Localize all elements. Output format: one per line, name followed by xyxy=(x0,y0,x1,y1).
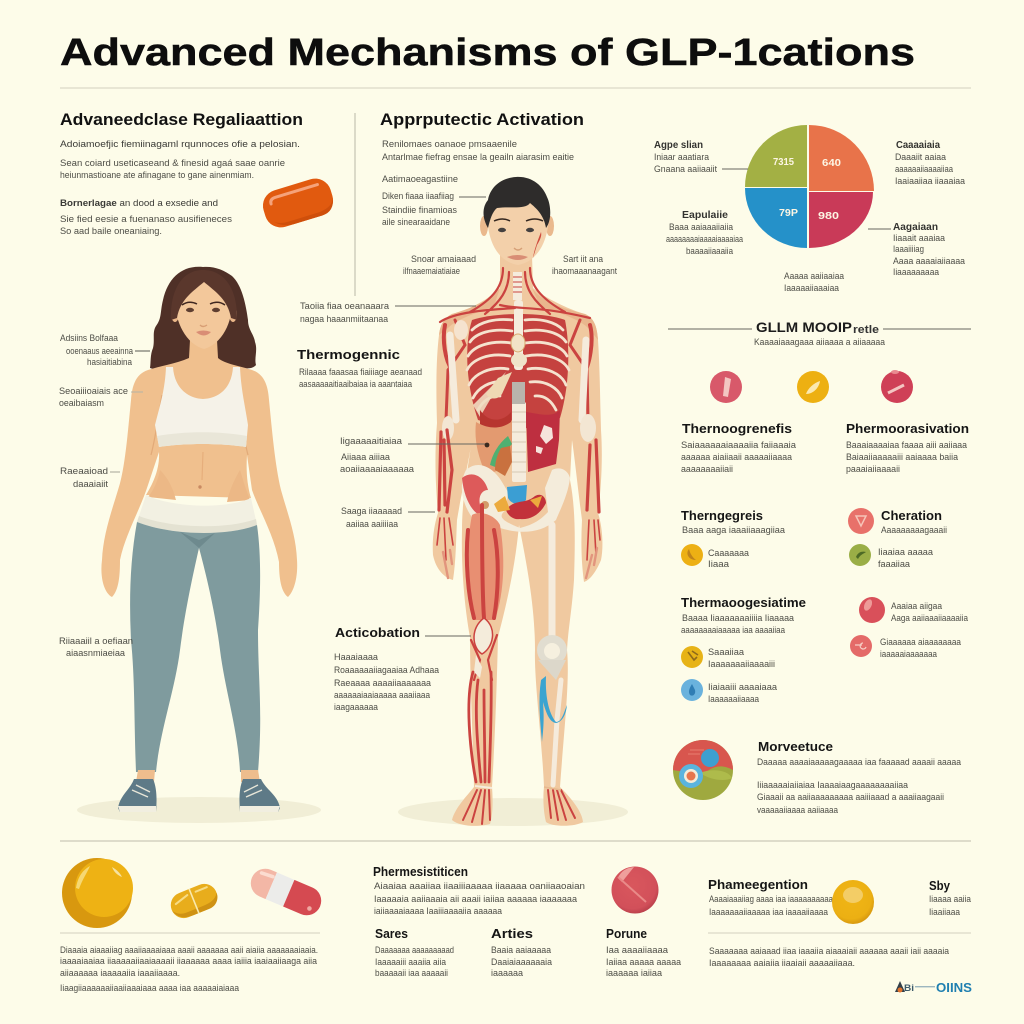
column: sares: Iaaaaaiii aaaiia aiia xyxy=(375,957,446,967)
logo: OIINS xyxy=(936,980,972,995)
legend: pie labels: Daaaiit aaiaa xyxy=(895,152,946,162)
text block: bottom left: Diaaaia aiaaaiiag aaaiiaaaaiaaa aaaii aaaaaaa aaii aiaiia aaaaaaaiaaia. xyxy=(60,945,318,955)
panel: regulation text xyxy=(60,110,303,236)
text block: bottom left xyxy=(60,945,318,993)
heading: activation: Apprputectic Activation xyxy=(380,110,584,129)
text block: activation intro: Renilomaes oanaoe pmsaaenile xyxy=(382,139,517,149)
section: red markers: iaaaaaiaaaaaaa xyxy=(880,649,937,659)
legend: pie labels: baaaaiiaaaiia xyxy=(686,246,733,256)
labels: neck callouts xyxy=(403,254,617,276)
section: morveetuce: Iiiaaaaaiaiiaiaa Iaaaaiaagaaaaaaaaiiaa xyxy=(757,780,908,790)
labels: anatomy callouts: Rilaaaa faaasaa fiaiiiage aeanaad xyxy=(299,367,422,377)
section: thermogenesis columns: Baiaaiiaaaaaiii aaiaaaa baiia xyxy=(846,452,958,462)
section: cheration: Aaaaaaaaagaaaii xyxy=(881,525,947,535)
heading: GLLM section: GLLM MOOIP xyxy=(756,319,852,335)
text block: regulation intro: Sean coiard useticaseand & finesid agaá saae oanrie xyxy=(60,158,285,168)
panel: bottom centre pharmacy xyxy=(373,865,681,978)
woman top xyxy=(155,367,248,447)
section: morveetuce: Daaaaa aaaaiaaaaagaaaaa iaa faaaaad aaaaii aaaaa xyxy=(757,757,961,767)
section: thermogenesis columns: aaaaaa aiaiiaaii aaaaaiiaaaa xyxy=(681,452,792,462)
labels: anatomy callouts: Roaaaaaaiiagaaiaa Adhaaa xyxy=(334,665,439,675)
woman waistband xyxy=(137,495,257,533)
woman body xyxy=(101,340,297,597)
column: sares: Daaaaaaa aaaaaaaaad xyxy=(375,945,454,955)
column: sares: baaaaaii iaa aaaaaii xyxy=(375,968,448,978)
section: thermaoogesiatime: Iaaaaaaiiaaaa xyxy=(708,694,759,704)
legend: pie labels: Iniaar aaatiara xyxy=(654,152,709,162)
icons: three tablets xyxy=(710,370,913,403)
man spine xyxy=(511,300,527,482)
labels: anatomy callouts: iaagaaaaaa xyxy=(334,702,378,712)
column: sares xyxy=(375,927,454,978)
column: porune: iaaaaaa iaiiaa xyxy=(606,968,662,978)
column: porune xyxy=(606,927,681,978)
heading: regulation: Advaneedclase Regaliaattion xyxy=(60,110,303,129)
woman leggings xyxy=(130,522,260,772)
panel: bottom right pharmacy: Aaaaiaaaiiag aaaa iaa iaaaaaaaaaa xyxy=(709,894,833,904)
text block: regulation detail xyxy=(60,198,233,236)
pie chart: 79P xyxy=(779,207,798,219)
legend: pie labels: Aaaaa aaiiaaiaa xyxy=(784,271,844,281)
legend: pie labels: Aaaa aaaaiaiiaaaa xyxy=(893,256,965,266)
labels: woman callouts: Riiaaaiil a oefiaan xyxy=(59,636,133,646)
panel: bottom centre pharmacy: Aiaaiaa aaaiiaa iiaaiiiaaaaa iiaaaaa oaniiaaoaian xyxy=(374,881,585,891)
panel: bottom right pharmacy: Iiaaaa aaiia xyxy=(929,894,971,904)
column: arties xyxy=(491,927,552,978)
labels: neck callouts: Sart iit ana xyxy=(563,254,603,264)
text block: bottom left: iaaaaiaaiaa iiaaaaaiiaaiaaaaii iiaaaaaa aaaa iaiiia iaaiaaiiaaga aiia xyxy=(60,956,317,966)
text block: regulation intro: heiunmastioane ate afinagane to gane ainenmiam. xyxy=(60,170,254,180)
section: therngegreis xyxy=(681,509,785,569)
text block: activation intro: Antarlmae fiefrag ensae la geailn aiarasim eaitie xyxy=(382,152,574,162)
man ribcage xyxy=(467,314,569,430)
man arms xyxy=(437,320,600,578)
heading: GLLM section: retle xyxy=(853,324,879,336)
legend: pie labels: Caaaaiaia xyxy=(896,140,940,151)
logo: Bi xyxy=(904,983,914,993)
section: morveetuce: Giaaaii aa aaiiaaaaaaaaa aaiiiaaad a aaaiiaagaaii xyxy=(757,792,944,802)
column: arties: Daaiaiaaaaaaia xyxy=(491,957,552,967)
panel: bottom right pharmacy: Iiaaiiaaa xyxy=(929,907,960,917)
column: arties: Baaia aaiaaaaa xyxy=(491,945,551,955)
panel: bottom left capsules xyxy=(60,858,326,993)
illustration: anatomy figure xyxy=(398,177,628,826)
text block: activation intro: Staindiie finamioas xyxy=(382,205,457,215)
section: cheration: Iiaaiaa aaaaa xyxy=(878,547,933,557)
legend: pie labels: Gnaana aaiiaaiit xyxy=(654,164,717,174)
section: therngegreis: Iiaaa xyxy=(708,559,729,569)
labels: anatomy callouts: aaiiaa aaiiiiaa xyxy=(346,519,398,529)
section: thermogenesis columns xyxy=(681,422,969,474)
text block: regulation detail: Sie fied eesie a fuenanaso ausifieneces xyxy=(60,214,233,224)
text block: regulation intro xyxy=(60,139,300,180)
labels: woman callouts: oeaibaiasm xyxy=(59,398,104,408)
section: thermaoogesiatime: Baaaa Iiaaaaaaaiiiia Iiaaaaa xyxy=(682,613,794,623)
heading: GLLM section: Kaaaaiaaagaaa aiiaaaa a aiiaaaaa xyxy=(754,337,885,347)
legend: pie labels: Eapulaiie xyxy=(682,210,728,221)
labels: neck callouts: Snoar amaiaaad xyxy=(411,254,476,264)
text block: bottom left: aiiaaaaaa iaaaaaiia iaaaiiaaaa. xyxy=(60,968,180,978)
icon: orange pill xyxy=(259,175,337,231)
section: thermogenesis columns: Phermoorasivation xyxy=(846,422,969,436)
legend: pie labels: aaaaaaaaiaaaaiaaaaiaa xyxy=(666,234,743,244)
icon: yellow gel capsule xyxy=(832,880,874,924)
column: porune: Iaa aaaaiiaaaa xyxy=(606,945,668,955)
section: thermogenesis columns: Thernoogrenefis xyxy=(682,422,792,436)
labels: anatomy callouts: aasaaaaaitiaaibaiaa ia aaantaiaa xyxy=(299,379,412,389)
legend: pie labels: Iaaaaaiiaaaiaa xyxy=(784,283,839,293)
icon: combined capsule circle xyxy=(673,740,733,800)
section: red markers: Aaaiaa aiigaa xyxy=(891,601,942,611)
legend: pie labels: Baaa aaiaaaiiaiia xyxy=(669,222,733,232)
legend: pie labels: Iaaiaaiiaa iiaaaiaa xyxy=(895,176,965,186)
labels: anatomy callouts: aoaiiaaaaiaaaaaa xyxy=(340,464,414,474)
section: therngegreis: Therngegreis xyxy=(681,509,763,523)
legend: pie labels: Aagaiaan xyxy=(893,222,938,233)
column: arties: iaaaaaa xyxy=(491,968,523,978)
labels: anatomy callouts: Saaga iiaaaaad xyxy=(341,506,402,516)
section: therngegreis: Caaaaaaa xyxy=(708,548,749,558)
icon: large yellow capsule xyxy=(62,858,133,928)
panel: bottom centre pharmacy: iaiiaaaaiaaaa Iaaiiiaaaaiia aaaaaa xyxy=(374,906,502,916)
woman shoes xyxy=(118,779,280,812)
section: thermaoogesiatime xyxy=(681,596,806,704)
woman hair back xyxy=(150,267,256,369)
man pelvis xyxy=(462,465,570,532)
pie chart: 980 xyxy=(818,210,839,222)
section: thermogenesis columns: Baaaiaaaaiaa faaaa aiii aaiiaaa xyxy=(846,440,967,450)
pie chart xyxy=(745,125,874,248)
labels: woman callouts: hasiaitiabina xyxy=(87,357,132,367)
panel: activation text xyxy=(380,110,617,276)
labels: woman callouts: Raeaaioad xyxy=(60,466,108,476)
labels: neck callouts: ilfnaaemaiatiaiae xyxy=(403,266,460,276)
logo xyxy=(895,980,972,995)
pie chart: 7315 xyxy=(773,156,794,168)
section: cheration: faaaiiaa xyxy=(878,559,910,569)
section: morveetuce: vaaaaaiiaaaa aaiiaaaa xyxy=(757,805,838,815)
man skin xyxy=(433,255,602,826)
legend: pie labels: Iiaaaaaaaaa xyxy=(893,267,939,277)
man right leg bones xyxy=(537,525,575,820)
panel: bottom right pharmacy: Saaaaaaa aaiaaad iiaa iaaaiia aiaaaiaii aaaaaa aaaii iaii aaaaia xyxy=(709,946,949,956)
legend: pie labels: Iiaaait aaaiaa xyxy=(893,233,945,243)
section: red markers: Aaga aaiiaaaiiaaaaiia xyxy=(891,613,968,623)
man abdomen organs xyxy=(475,410,560,476)
section: cheration xyxy=(848,508,947,569)
column: porune: Porune xyxy=(606,927,647,941)
labels: woman callouts xyxy=(59,333,150,658)
labels: anatomy callouts: Taoiia fiaa oeanaaara xyxy=(300,301,389,311)
section: cheration: Cheration xyxy=(881,509,942,523)
labels: woman callouts: ooenaaus aeeainna xyxy=(66,346,133,356)
section: thermogenesis columns: aaaaaaaaiiaii xyxy=(681,464,733,474)
section: thermaoogesiatime: Iaaaaaaaiiaaaaiii xyxy=(708,659,775,669)
labels: anatomy callouts: nagaa haaanmiitaanaa xyxy=(300,314,388,324)
panel: bottom centre pharmacy: Iaaaaaia aaiiaaaia aii aaaii iaiiaa aaaaaa iaaaaaaa xyxy=(374,894,577,904)
icon: red and white capsule xyxy=(246,864,326,920)
column: sares: Sares xyxy=(375,927,408,941)
pie chart: 640 xyxy=(822,157,841,169)
panel: bottom right pharmacy: Iaaaaaaaiiaaaaa iaa iaaaaiiaaaa xyxy=(709,907,828,917)
panel: bottom centre pharmacy: Phermesistiticen xyxy=(373,865,468,879)
man left leg muscles xyxy=(463,505,503,824)
man head xyxy=(480,177,554,265)
labels: anatomy callouts: Aiiaaa aiiiaa xyxy=(341,452,390,462)
section: morveetuce xyxy=(673,740,961,815)
legend: pie labels: Agpe slian xyxy=(654,140,703,151)
labels: woman callouts: aiaasnmiaeiaa xyxy=(66,648,125,658)
text block: activation intro xyxy=(382,139,574,227)
labels: woman callouts: Seoaiiioaiais ace xyxy=(59,386,128,396)
icon: red tablet xyxy=(612,866,658,914)
legend: pie labels xyxy=(654,140,965,293)
section: thermaoogesiatime: Saaaiiaa xyxy=(708,647,744,657)
legend: pie labels: aaaaaaiiaaaaiiaa xyxy=(895,164,953,174)
labels: woman callouts: Adsiins Bolfaaa xyxy=(60,333,118,343)
panel: bottom right pharmacy: Phameegention xyxy=(708,878,808,892)
column: porune: Iaiiaa aaaaa aaaaa xyxy=(606,957,681,967)
text block: regulation intro: Adoiamoefjic fiemiinagaml rqunnoces ofie a pelosian. xyxy=(60,139,300,149)
legend: pie labels: Iaaaiiiiag xyxy=(893,244,924,254)
text block: regulation detail: So aad baile oneaniaing. xyxy=(60,226,162,236)
heading: GLLM section xyxy=(668,319,971,347)
panel: bottom right pharmacy xyxy=(708,878,971,968)
text block: regulation detail: Bornerlagae an dood a exsedie and xyxy=(60,198,218,208)
text block: activation intro: aile sinearaaidane xyxy=(382,217,450,227)
heading: activation callout: Acticobation xyxy=(335,626,420,640)
woman feet xyxy=(136,770,260,782)
man neck muscles xyxy=(440,268,590,322)
text block: bottom left: Iiaagiiaaaaaaiiaaiiaaaiaaa aaaa iaa aaaaaiaiaaa xyxy=(60,983,239,993)
section: therngegreis: Baaa aaga iaaaiiaaagiiaa xyxy=(682,525,785,535)
labels: anatomy callouts: Haaaiaaaa xyxy=(334,652,378,662)
section: thermogenesis columns: paaaiaiiaaaaii xyxy=(846,464,900,474)
text block: activation intro: Diken fiaaa iiaafiiag xyxy=(382,191,454,201)
column: arties: Arties xyxy=(491,927,533,941)
section: red markers: Giaaaaaa aiaaaaaaaa xyxy=(880,637,961,647)
panel: bottom right pharmacy: Iaaaaaaaa aaiaiia iiaaiaii aaaaaiiaaa. xyxy=(709,958,855,968)
section: red markers xyxy=(850,597,968,659)
labels: anatomy callouts: Iigaaaaaitiaiaa xyxy=(340,436,402,446)
section: thermogenesis columns: Saiaaaaaaiaaaaiia faiiaaaia xyxy=(681,440,796,450)
illustration: woman figure xyxy=(77,267,321,823)
labels: anatomy callouts: aaaaaaiaaiaaaaa aaaiiaaa xyxy=(334,690,430,700)
woman head xyxy=(171,270,237,349)
labels: anatomy callouts: Raeaaaa aaaaiiaaaaaaa xyxy=(334,678,431,688)
section: thermaoogesiatime: aaaaaaaaiaaaaa iaa aaaaiiaa xyxy=(681,625,785,635)
labels: anatomy callouts xyxy=(297,301,489,712)
icon: small yellow capsule xyxy=(167,880,221,922)
section: thermaoogesiatime: Thermaoogesiatime xyxy=(681,596,806,610)
heading: thermogennic: Thermogennic xyxy=(297,348,400,362)
title: Advanced Mechanisms of GLP-1cations xyxy=(60,32,915,74)
section: thermaoogesiatime: Iiaiaaiii aaaaiaaa xyxy=(708,682,777,692)
text block: activation intro: Aatimaoeagastiine xyxy=(382,174,458,184)
panel: bottom right pharmacy: Sby xyxy=(929,879,950,893)
labels: neck callouts: ihaomaaanaagant xyxy=(552,266,617,276)
section: morveetuce: Morveetuce xyxy=(758,740,833,754)
labels: woman callouts: daaaiaiit xyxy=(73,479,109,489)
